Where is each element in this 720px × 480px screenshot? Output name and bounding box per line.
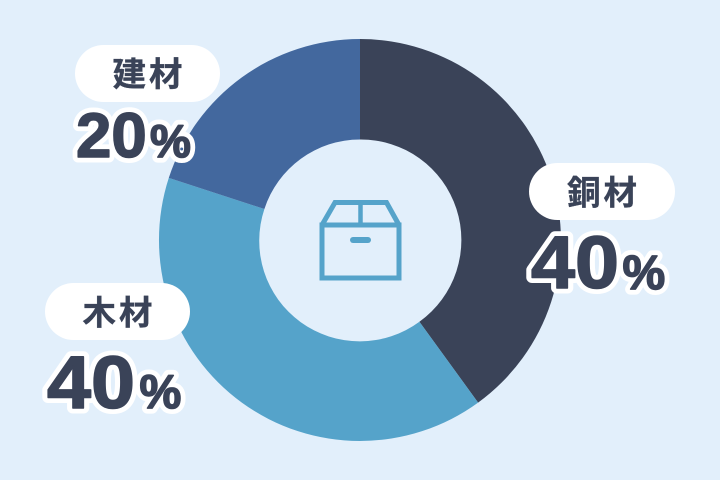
donut chart — [159, 39, 561, 441]
label: 建材: 建材 — [112, 57, 186, 94]
label: 銅材: 銅材 — [567, 176, 640, 212]
value: 20%: % — [150, 115, 191, 167]
value: wood 40%: 40 — [47, 342, 135, 424]
label: 銅材 — [529, 163, 675, 220]
value: 20%: % — [150, 115, 191, 167]
segment: copper 40% — [360, 39, 561, 403]
value: wood 40%: 40 — [47, 342, 135, 424]
value: wood 40% — [47, 342, 181, 424]
label: 木材 — [45, 283, 190, 340]
value: copper 40%: % — [622, 247, 665, 300]
value: copper 40%: 40 — [531, 222, 619, 304]
value: copper 40%: % — [622, 247, 665, 300]
segment: wood 40% — [159, 178, 478, 441]
value: copper 40% — [531, 222, 665, 304]
icon: cardboard box — [322, 202, 399, 278]
value: 20%: 20 — [76, 101, 147, 171]
value: 20% — [76, 101, 191, 171]
label: 木材: 木材 — [82, 296, 156, 332]
value: wood 40%: % — [140, 365, 181, 418]
value: copper 40%: 40 — [531, 222, 619, 304]
value: wood 40%: % — [140, 365, 181, 418]
value: 20%: 20 — [76, 101, 147, 171]
segment: building material 20% — [169, 39, 360, 209]
label: 建材 — [75, 45, 220, 102]
